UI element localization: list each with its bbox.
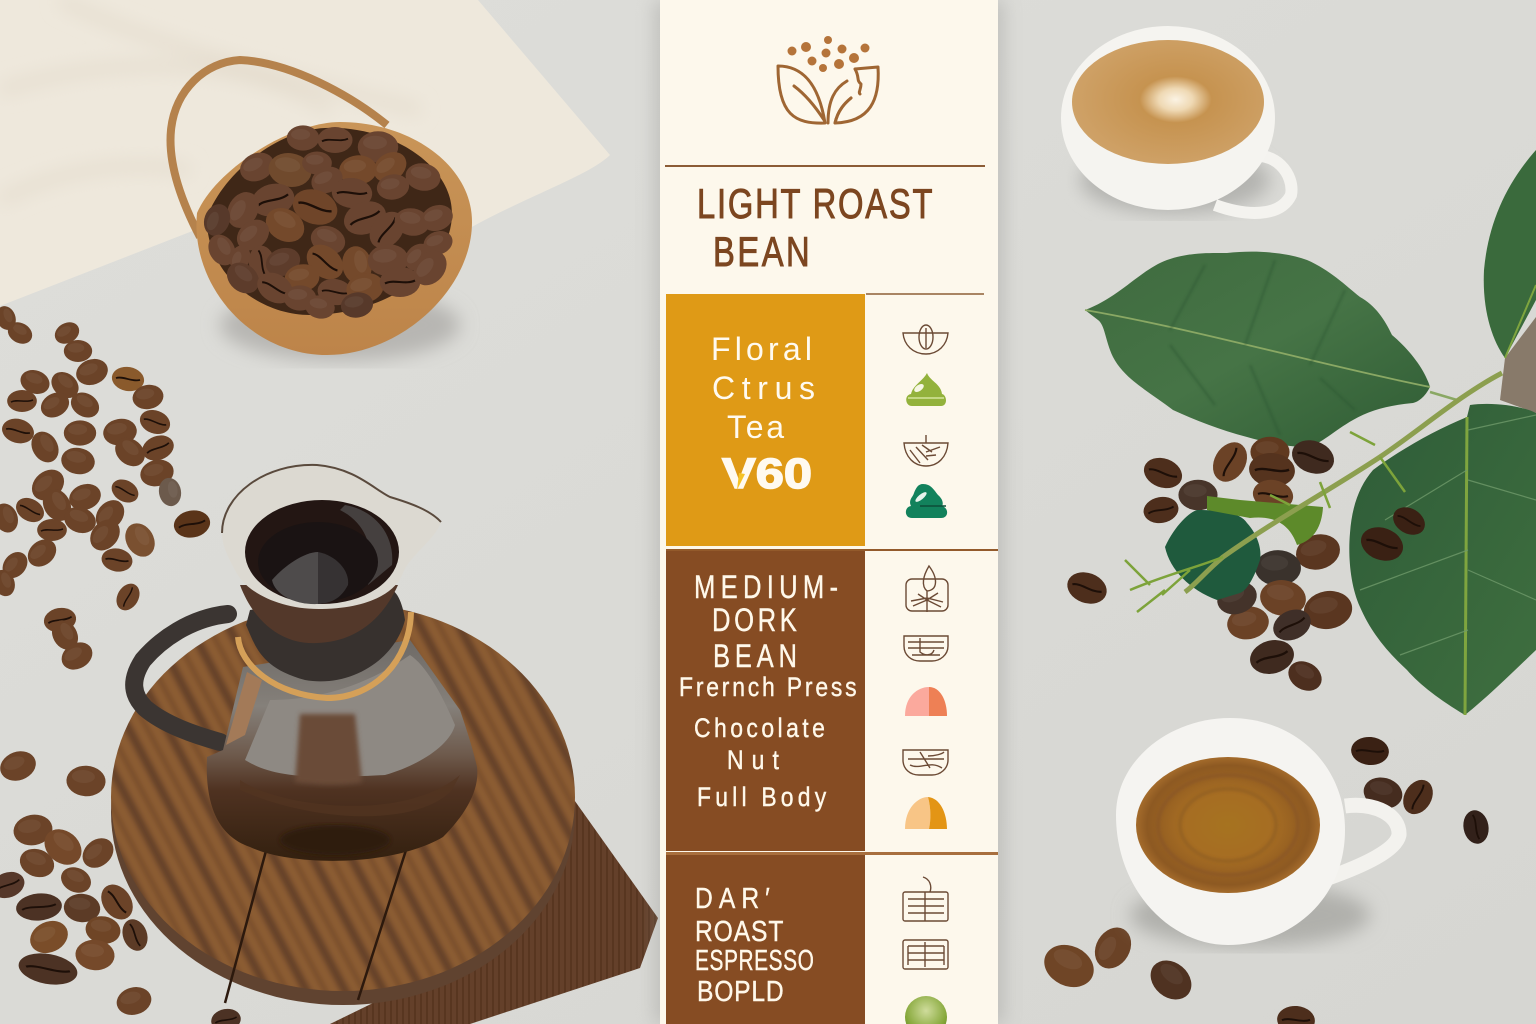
photo: round wooden board — [100, 590, 590, 1005]
icon: lined bowl one — [904, 636, 948, 661]
text: medium-dark roast labels: DORK — [712, 603, 797, 639]
text: dark roast labels: ROAST — [695, 915, 783, 947]
icon: grid with stem — [903, 877, 948, 921]
text: V60 label: V60 — [722, 450, 812, 498]
text: light roast flavours: Tea — [727, 409, 784, 445]
text: medium-dark roast labels: Full Body — [697, 782, 827, 812]
panel: medium-dark block — [666, 551, 865, 851]
photo: coffee leaves and branch — [1085, 150, 1536, 715]
icons: medium-dark flavour column — [903, 566, 948, 829]
icon: light green drop — [906, 373, 946, 406]
text: light roast flavours: Ctrus — [712, 370, 815, 406]
photo: wooden bowl of coffee beans — [170, 60, 472, 361]
icon: leaf and bean logo — [778, 36, 878, 123]
text: dark roast labels — [695, 882, 814, 1007]
text: medium-dark roast labels: Chocolate — [694, 713, 825, 743]
photo: sugar cup — [1061, 26, 1292, 214]
photo: espresso cup — [1116, 718, 1399, 947]
icon: grid book — [903, 940, 948, 969]
icon: orange dome — [905, 797, 947, 829]
title: Light Roast Bean: LIGHT ROAST — [697, 180, 933, 227]
icon: bowl with leaf veins — [904, 435, 948, 466]
text: dark roast labels: ESPRESSO — [695, 945, 814, 977]
text: dark roast labels: DAR′ — [695, 882, 770, 914]
photo: linen cloth — [0, 0, 610, 306]
photo: scattered beans lower left — [0, 746, 243, 1024]
text: light roast flavours: Floral — [711, 331, 812, 367]
photo: scattered beans upper left — [0, 303, 212, 675]
title: Light Roast Bean: BEAN — [713, 228, 810, 275]
photo: glass coffee carafe — [134, 465, 477, 861]
panel: roast guide column — [654, 0, 1004, 1024]
text: dark roast labels: BOPLD — [697, 975, 784, 1007]
panel: dark roast block — [666, 855, 865, 1024]
photo: scattered beans right — [1037, 435, 1491, 1024]
icon: peach dome — [905, 687, 947, 716]
text: medium-dark roast labels: Frernch Press — [679, 672, 857, 702]
heading rule — [665, 165, 985, 167]
text: medium-dark roast labels — [679, 570, 857, 812]
icon: lined bowl two — [903, 750, 948, 775]
text: medium-dark roast labels: MEDIUM- — [694, 570, 838, 606]
icon: flame over box — [906, 566, 948, 612]
photo: burlap mat — [330, 780, 658, 1024]
icons: dark roast flavour column — [903, 877, 948, 1024]
icons: light roast flavour column — [903, 325, 948, 518]
panel: light roast block — [666, 294, 865, 546]
icon: green ball — [905, 996, 947, 1024]
text: medium-dark roast labels: BEAN — [713, 639, 797, 675]
icon: dark green drop — [906, 484, 947, 518]
title: Light Roast Bean — [697, 180, 933, 275]
icon: bowl with bean — [903, 325, 948, 354]
text: medium-dark roast labels: Nut — [727, 745, 779, 775]
text: light roast flavours — [711, 331, 815, 445]
photo: branch with small leaves — [1125, 373, 1502, 612]
